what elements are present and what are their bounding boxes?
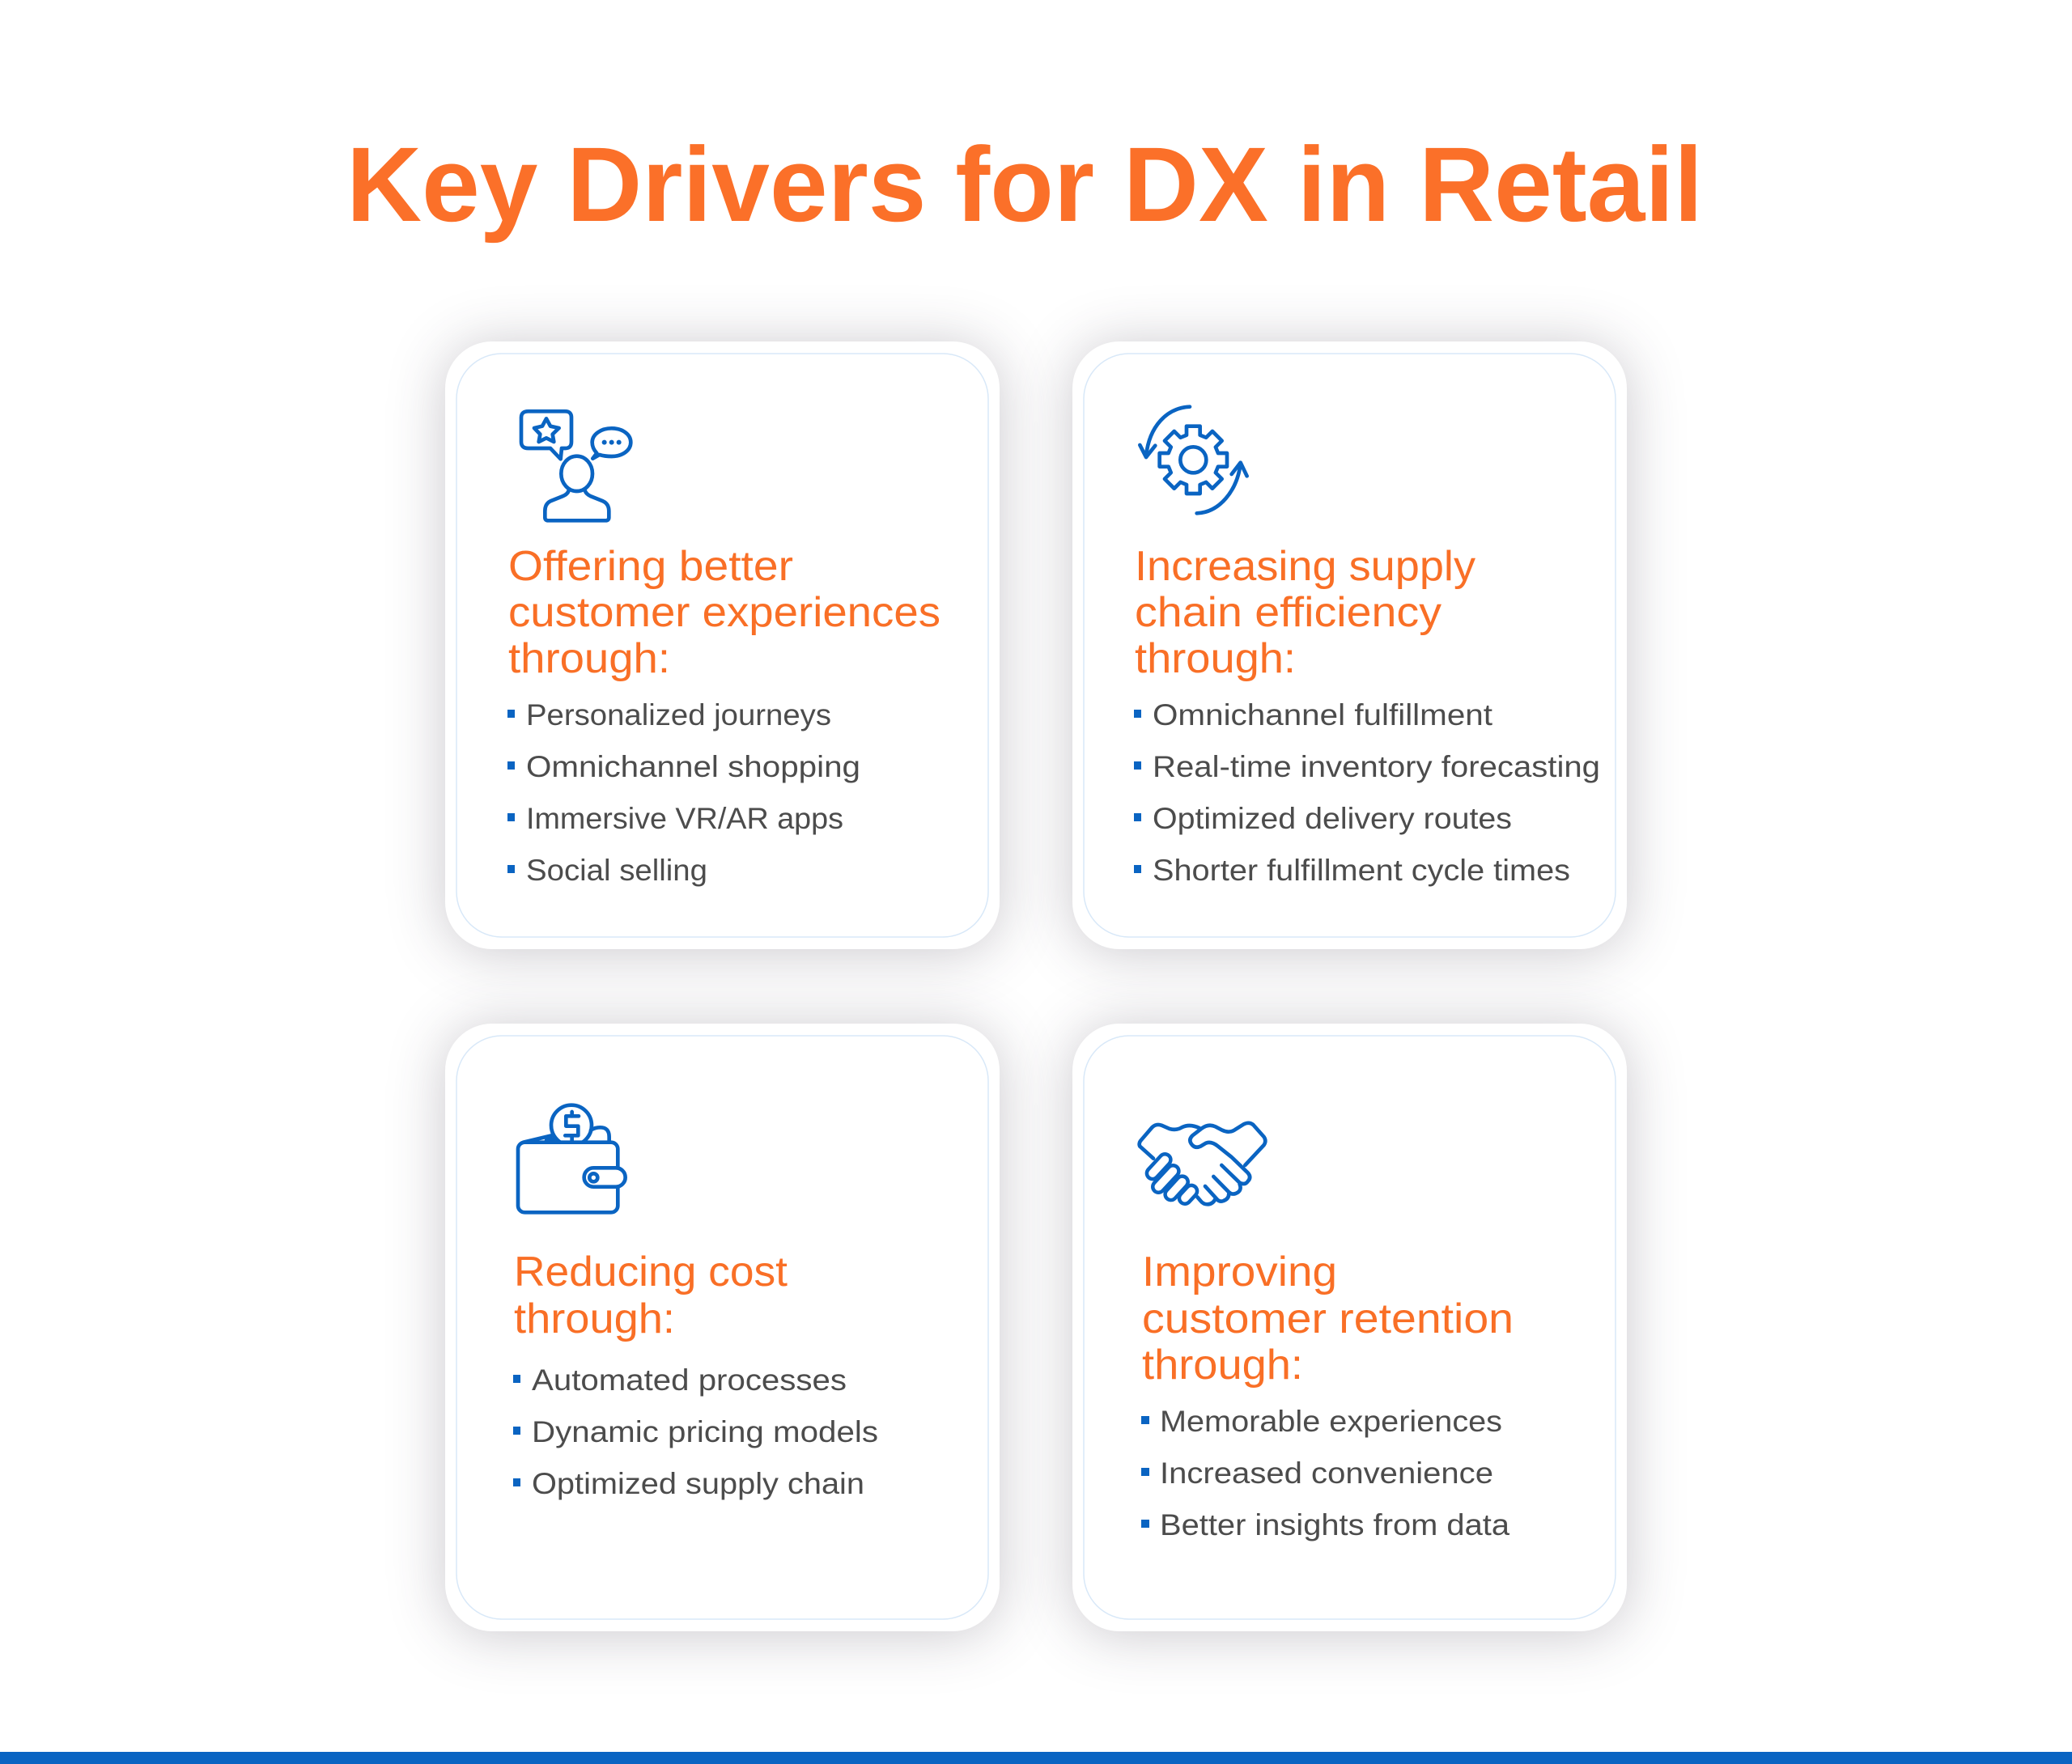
panel: supply chain efficiency xyxy=(1072,341,1627,949)
heading: chain efficiency xyxy=(1135,589,1441,636)
bullet list: Dynamic pricing models xyxy=(532,1415,878,1448)
heading: customer experiences xyxy=(508,589,940,636)
bullet list: Real-time inventory forecasting xyxy=(1153,750,1600,783)
heading: Increasing supply xyxy=(1135,543,1475,590)
heading xyxy=(1142,1249,1514,1389)
bullet list xyxy=(1134,698,1600,887)
heading: Improving xyxy=(1142,1249,1337,1295)
bullet list: Omnichannel fulfillment xyxy=(1153,698,1493,731)
bullet list: Increased convenience xyxy=(1160,1457,1493,1490)
bullet list: Personalized journeys xyxy=(526,698,831,731)
heading xyxy=(1135,543,1475,682)
footer bar xyxy=(0,1752,2072,1764)
heading xyxy=(514,1249,788,1342)
bullet list: Better insights from data xyxy=(1160,1508,1509,1541)
heading: Offering better xyxy=(508,543,793,590)
heading: through: xyxy=(514,1295,675,1342)
bullet list: Memorable experiences xyxy=(1160,1405,1502,1438)
bullet list: Omnichannel shopping xyxy=(526,750,860,783)
bullet list: Shorter fulfillment cycle times xyxy=(1153,854,1570,887)
icon: gear with rotating arrows xyxy=(1140,407,1247,513)
panel: customer experiences xyxy=(445,341,1000,949)
bullet list xyxy=(1141,1405,1509,1541)
panel: reducing cost xyxy=(445,1024,1000,1631)
bullet list xyxy=(513,1363,878,1500)
title: Key Drivers for DX in Retail xyxy=(346,125,1703,244)
panel: customer retention xyxy=(1072,1024,1627,1631)
bullet list xyxy=(507,698,860,887)
bullet list: Social selling xyxy=(526,854,707,887)
heading: customer retention xyxy=(1142,1295,1514,1342)
bullet list: Optimized supply chain xyxy=(532,1467,864,1500)
heading: through: xyxy=(1135,635,1296,682)
heading: through: xyxy=(1142,1342,1303,1389)
icon: customer with speech bubbles xyxy=(521,411,631,520)
heading: through: xyxy=(508,635,670,682)
icon: handshake xyxy=(1140,1123,1265,1204)
heading xyxy=(508,543,940,682)
bullet list: Optimized delivery routes xyxy=(1153,802,1512,835)
bullet list: Immersive VR/AR apps xyxy=(526,802,843,835)
icon: wallet with dollar coin xyxy=(518,1105,626,1212)
heading: Reducing cost xyxy=(514,1249,788,1295)
bullet list: Automated processes xyxy=(532,1363,847,1397)
